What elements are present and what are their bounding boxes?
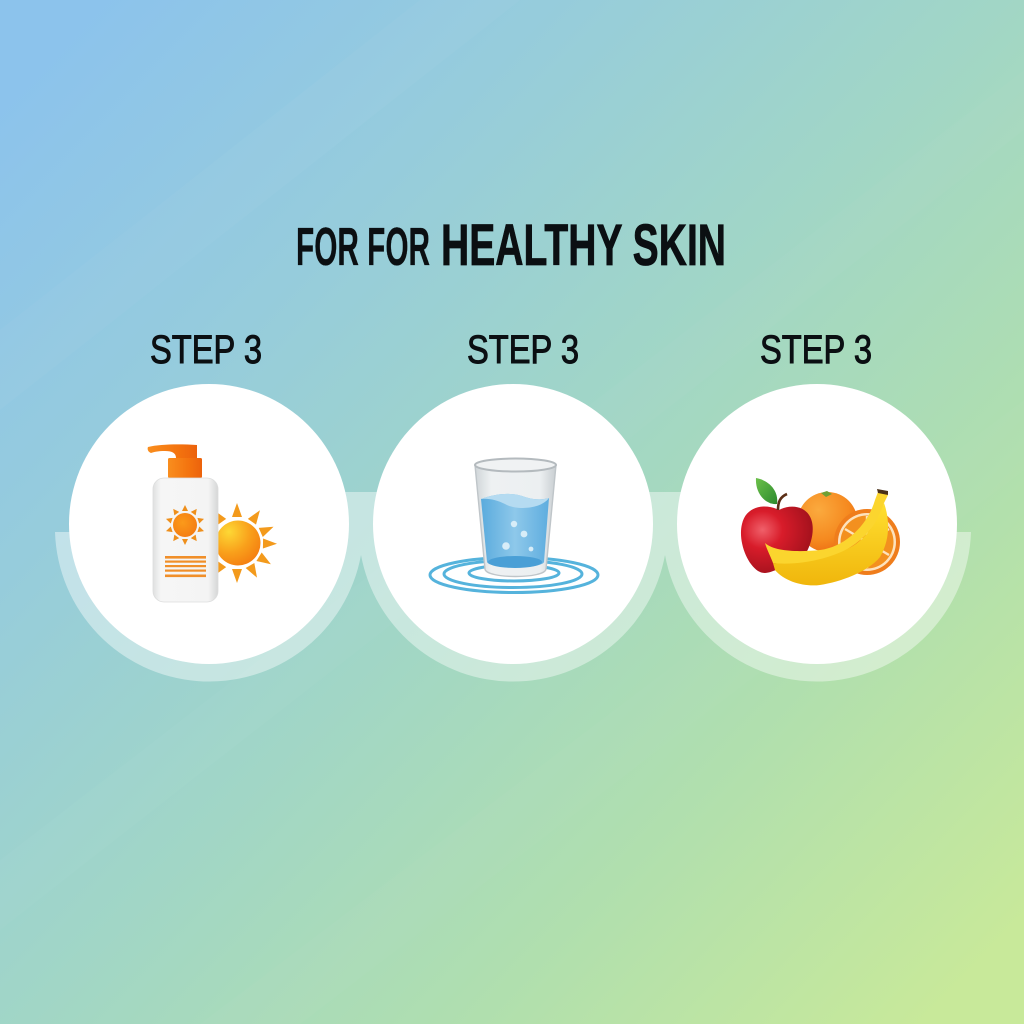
- step label 3: STEP 3: [760, 328, 872, 372]
- icon: water glass with ripples: [430, 458, 598, 592]
- icon: glass rim: [475, 458, 556, 472]
- icon: label sun: [165, 505, 205, 545]
- icon: banana: [765, 489, 888, 585]
- icon: lower banana: [773, 503, 888, 585]
- icon: glass body: [475, 465, 556, 576]
- step label 2: STEP 3: [467, 328, 579, 372]
- step label 1: STEP 3: [150, 328, 262, 372]
- icon: sunscreen bottle and sun: [148, 444, 277, 602]
- title: HEALTHY SKIN: [441, 213, 726, 278]
- icon: label lines: [165, 556, 206, 577]
- connecting scalloped band: [55, 492, 971, 682]
- icon: fruit group: [741, 478, 900, 585]
- icon: orange slice: [834, 509, 900, 575]
- icon: pump: [148, 444, 202, 478]
- icon: large sun: [210, 503, 277, 583]
- title: [296, 213, 726, 278]
- icon: bottle body: [153, 478, 218, 602]
- icon: banana stem: [877, 489, 888, 495]
- circle 2: [373, 384, 653, 664]
- icon: upper banana: [765, 492, 888, 564]
- icon: apple: [741, 478, 813, 573]
- title: FOR FOR: [296, 217, 430, 277]
- icon: orange: [798, 491, 858, 552]
- icon: bubbles: [502, 521, 533, 551]
- circle 1: [69, 384, 349, 664]
- icon: ripples: [430, 558, 598, 592]
- icon: water: [481, 494, 549, 567]
- circle 3: [677, 384, 957, 664]
